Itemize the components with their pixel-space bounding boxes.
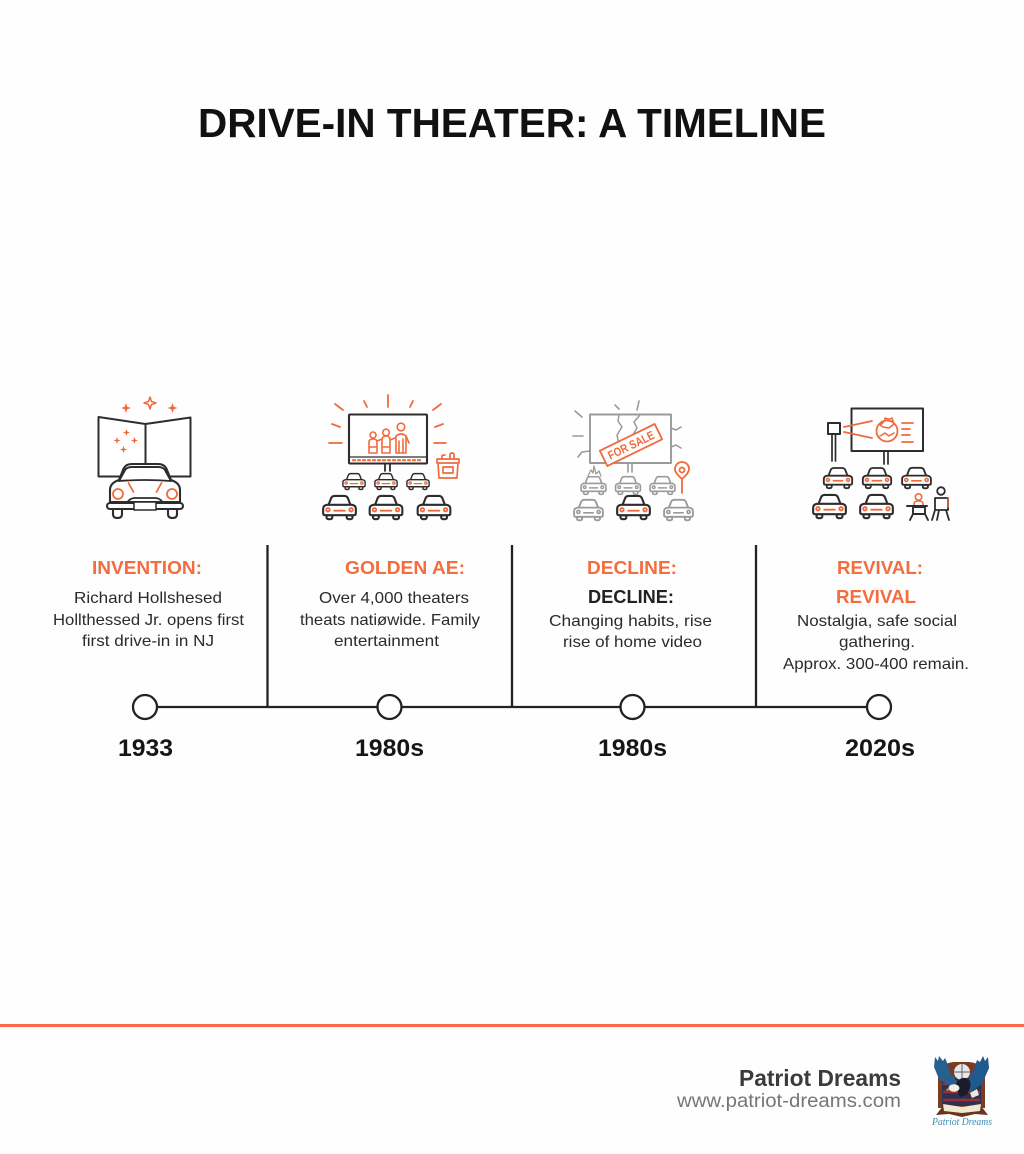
- panel: revival text: REVIVAL:: [837, 558, 923, 578]
- year labels: 1980s: [355, 735, 424, 762]
- panel: golden age text: [300, 558, 480, 650]
- panel: decline text: Changing habits, rise: [549, 613, 712, 630]
- icon: patriot dreams logo: [931, 1056, 992, 1128]
- year labels: [118, 735, 915, 762]
- panel: decline text: [549, 558, 712, 651]
- panel: revival text: Nostalgia, safe social: [797, 613, 957, 630]
- year labels: 1980s: [598, 735, 667, 762]
- panel: golden age text: theats natiøwide. Family: [300, 612, 480, 629]
- panel: revival text: REVIVAL: [836, 587, 916, 607]
- icon: revival, projector and cars with people: [813, 408, 949, 520]
- panel: invention text: [53, 558, 245, 650]
- for sale stamp: FOR SALE: [606, 428, 657, 463]
- title: DRIVE-IN THEATER: A TIMELINE: [198, 100, 826, 146]
- panel: decline text: DECLINE:: [588, 587, 674, 607]
- panel: decline text: DECLINE:: [587, 558, 677, 578]
- panel: invention text: INVENTION:: [92, 558, 202, 578]
- icon: decline, cracked screen for sale: [573, 401, 693, 520]
- year labels: 2020s: [845, 735, 915, 762]
- icon: golden age, family on screen with cars: [323, 395, 459, 519]
- panel: revival text: gathering.: [839, 634, 915, 651]
- panel: decline text: rise of home video: [563, 634, 702, 651]
- panel: golden age text: entertainment: [334, 633, 440, 650]
- panel: golden age text: Over 4,000 theaters: [319, 590, 469, 607]
- timeline axis: [133, 545, 891, 719]
- panel: invention text: Richard Hollshesed: [74, 590, 222, 607]
- footer brand text: Patriot Dreams: [739, 1065, 901, 1091]
- icon: invention, car before a drive-in screen: [98, 397, 190, 518]
- panel: golden age text: GOLDEN AE:: [345, 558, 465, 578]
- footer brand text: [676, 1065, 901, 1112]
- panel: revival text: [783, 558, 969, 673]
- panel: invention text: Hollthessed Jr. opens first: [53, 612, 245, 629]
- year labels: 1933: [118, 735, 173, 762]
- panel: invention text: first drive-in in NJ: [82, 633, 214, 650]
- footer brand text: www.patriot-dreams.com: [676, 1091, 901, 1112]
- icon: patriot dreams logo: Patriot Dreams: [931, 1117, 992, 1128]
- panel: revival text: Approx. 300-400 remain.: [783, 656, 969, 673]
- footer rule: [0, 1024, 1024, 1027]
